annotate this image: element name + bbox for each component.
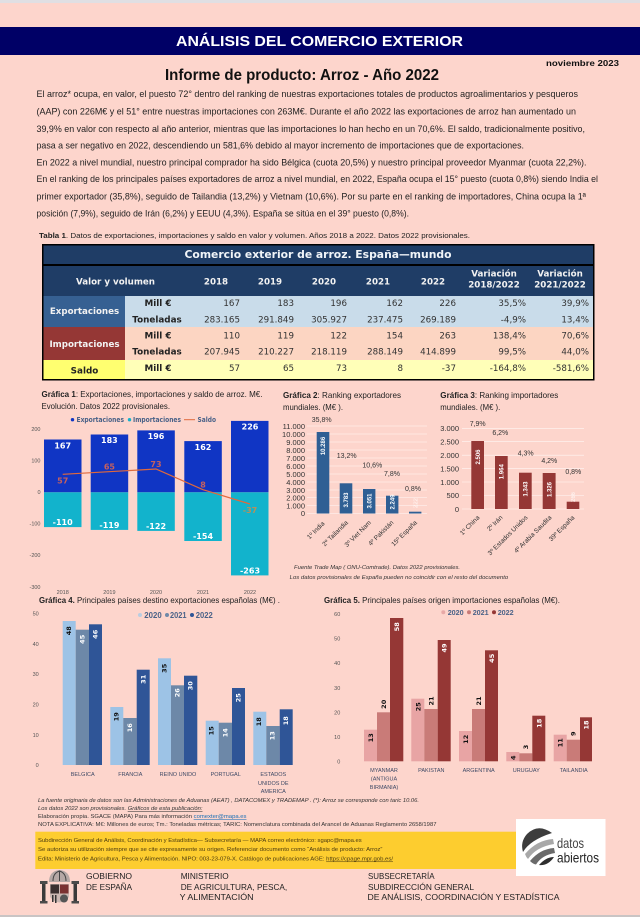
table: comercio exterior: Mill €	[145, 332, 171, 342]
chart 3 heading: Gráfica 3: Ranking importadores	[440, 390, 558, 400]
sources and notes: Elaboración propia. SGACE (MAPA) Para más información comexter@mapa.es	[38, 814, 247, 820]
chart 2: ranking exporters: 7.000	[286, 454, 305, 463]
chart 5: import origins: PAKISTAN	[418, 768, 445, 774]
table: comercio exterior: 57	[229, 364, 240, 374]
chart 2: ranking exporters: 4.000	[286, 478, 305, 487]
chart 1: exports, imports and balance: 196	[148, 432, 165, 441]
chart 2: ranking exporters: 2º Tailandia	[321, 519, 350, 548]
chart 3: ranking importers: 1.343	[524, 481, 530, 497]
legend: 2022	[498, 608, 514, 617]
table: comercio exterior: 65	[283, 364, 294, 374]
chart 1: exports, imports and balance: -200	[29, 553, 40, 559]
government block: DE ESPAÑA	[86, 882, 132, 892]
source note	[290, 565, 508, 581]
chart 5: import origins: 0	[337, 760, 340, 766]
chart 5: import origins: 4	[509, 755, 517, 760]
ministry block: Y ALIMENTACIÓN	[180, 892, 254, 902]
chart 3: ranking importers: 1º China	[459, 514, 482, 537]
chart 2: ranking exporters: 8.000	[286, 446, 305, 455]
chart 1: exports, imports and balance: -119	[99, 521, 120, 530]
table: comercio exterior: 2018/2022	[468, 280, 520, 290]
chart 5: import origins: 58	[393, 622, 401, 631]
chart 5: import origins	[334, 608, 592, 791]
chart 2: ranking exporters: 10.286	[321, 436, 327, 455]
chart 4 heading: Gráfica 4. Principales países destino exportaciones españolas (M€) .	[39, 595, 280, 605]
chart 1: exports, imports and balance: 8	[200, 480, 206, 490]
intro text block: (AAP) con 226M€ y el 51° entre nuestras importaciones con 263M€. Durante el año 2022 las exportaciones de arroz han aumentado un	[36, 106, 576, 118]
table: comercio exterior: 2018	[204, 278, 228, 288]
chart 4: export destinations: 35	[160, 663, 168, 673]
chart 4: export destinations: 46	[92, 629, 100, 639]
chart 1: exports, imports and balance: -110	[53, 518, 73, 527]
chart 2: ranking exporters: 6.000	[286, 462, 305, 471]
table: comercio exterior: Toneladas	[132, 316, 182, 326]
chart 2: ranking exporters: 4º Pakistán	[367, 519, 396, 548]
table: comercio exterior: 2021	[366, 278, 390, 288]
chart 3: ranking importers: 39º España	[548, 514, 577, 543]
chart 4: export destinations: 50	[33, 612, 39, 618]
table: comercio exterior: 70,6%	[561, 332, 589, 342]
government block: GOBIERNO	[86, 871, 132, 881]
chart 5: import origins: 13	[367, 733, 375, 742]
chart 2: ranking exporters: 0,8%	[405, 486, 421, 493]
chart 1: exports, imports and balance: 2019	[103, 590, 116, 596]
chart 1: exports, imports and balance: 0	[37, 490, 40, 496]
chart 5: import origins: URUGUAY	[513, 768, 540, 774]
chart 5: import origins: 20	[334, 710, 340, 716]
chart 1: exports, imports and balance: 57	[57, 476, 68, 486]
table: comercio exterior: Importaciones	[49, 340, 120, 350]
table: comercio exterior: 99,5%	[498, 348, 526, 358]
table: comercio exterior: -4,9%	[501, 316, 526, 326]
chart 5: import origins: 18	[535, 718, 543, 728]
chart 5: import origins: MYANMAR	[370, 768, 398, 774]
table: comercio exterior: Mill €	[145, 299, 171, 309]
table: comercio exterior: -164,8%	[490, 364, 526, 374]
chart 4: export destinations: 30	[33, 672, 39, 678]
icon: striped globe	[522, 828, 555, 865]
chart 4: export destinations	[33, 611, 293, 795]
table: comercio exterior: Valor y volumen	[76, 278, 155, 288]
chart 2: ranking exporters: 35,8%	[312, 417, 332, 424]
chart 2: ranking exporters: 10.000	[282, 430, 305, 439]
chart 2: ranking exporters: 3.000	[286, 486, 305, 495]
chart 2: ranking exporters	[282, 417, 427, 549]
intro text block	[36, 89, 598, 220]
table: comercio exterior: 8	[397, 364, 403, 374]
legend: 2021	[170, 611, 187, 620]
chart 5: import origins: 49	[441, 643, 449, 653]
logo: datos abiertos: abiertos	[557, 850, 599, 866]
chart 4: export destinations: 25	[235, 693, 243, 702]
chart 5: import origins: 30	[334, 686, 340, 692]
chart 4: export destinations: FRANCIA	[118, 772, 143, 778]
chart 3: ranking importers: 1.000	[440, 478, 459, 487]
title: Informe de producto: Arroz - Año 2022	[165, 67, 439, 84]
ministry block: MINISTERIO	[181, 871, 229, 881]
legend	[441, 608, 514, 617]
table: comercio exterior: 2021/2022	[534, 280, 586, 290]
chart 3: ranking importers	[440, 421, 584, 557]
header band: ANÁLISIS DEL COMERCIO EXTERIOR	[176, 33, 463, 50]
chart 3: ranking importers: 1.326	[548, 481, 554, 497]
legend: Saldo	[198, 416, 216, 424]
chart 2: ranking exporters: 11.000	[283, 422, 305, 431]
chart 5 heading: Gráfica 5. Principales países origen importaciones españolas (M€).	[324, 595, 560, 605]
chart 2: ranking exporters: 2.000	[286, 494, 305, 502]
chart 4: export destinations: 26	[174, 688, 182, 697]
chart 4: export destinations: 0	[36, 763, 39, 769]
chart 3: ranking importers: 1.964	[500, 464, 506, 479]
chart 4: export destinations: UNIDOS DE	[258, 781, 289, 787]
chart 1: exports, imports and balance: 2020	[150, 590, 162, 596]
chart 3: ranking importers: 3.000	[440, 424, 459, 433]
table: comercio exterior: 2019	[258, 278, 282, 288]
chart 4: export destinations: 13	[269, 731, 277, 740]
chart 1: exports, imports and balance: 183	[101, 436, 118, 445]
chart 3: ranking importers: 500	[446, 491, 459, 500]
yellow credits box: Subdirección General de Análisis, Coordinación y Estadística— Subsecretaría — MAPA correo electrónico: sgapc@mapa.es	[38, 838, 362, 844]
table: comercio exterior: 167	[223, 299, 240, 309]
table: comercio exterior: 414.899	[420, 348, 456, 358]
intro text block: pasa a ser negativo en 2022, descendiendo un 581,6% debido al mayor incremento de importaciones que de exportaciones.	[36, 140, 524, 152]
chart 1: exports, imports and balance: -263	[240, 566, 260, 576]
chart 4: export destinations: REINO UNIDO	[160, 772, 197, 778]
chart 3: ranking importers: 2.506	[476, 449, 482, 465]
legend	[138, 611, 213, 620]
chart 3: ranking importers: 4,3%	[518, 450, 534, 458]
chart 1: exports, imports and balance: 73	[150, 460, 162, 469]
chart 4: export destinations: 19	[113, 712, 121, 721]
legend	[71, 416, 216, 424]
chart 5: import origins: 45	[488, 653, 496, 663]
intro text block: En 2022 a nivel mundial, nuestro principal comprador ha sido Bélgica (cuota 20,5%) y nuestro principal proveedor Myanmar (cuota 22,2%).	[36, 158, 586, 168]
table: comercio exterior: 110	[223, 332, 240, 342]
icon: coat of arms	[40, 870, 79, 904]
chart 5: import origins: 21	[475, 696, 483, 706]
chart 4: export destinations: 48	[65, 626, 73, 635]
chart 4: export destinations: ESTADOS	[260, 772, 287, 778]
undersecretariat block	[368, 871, 560, 902]
logo: datos abiertos: datos	[557, 835, 584, 851]
table: comercio exterior: 35,5%	[498, 299, 526, 309]
undersecretariat block: SUBSECRETARÍA	[368, 871, 435, 881]
chart 5: import origins: 11	[557, 738, 565, 747]
table: comercio exterior: 269.189	[420, 316, 456, 326]
chart 1: exports, imports and balance: 2021	[197, 590, 209, 596]
chart 1: exports, imports and balance: 226	[242, 422, 259, 432]
chart 5: import origins: BIRMANIA)	[370, 785, 398, 791]
chart 2: ranking exporters: 3.783	[344, 492, 350, 508]
intro text block: El arroz* ocupa, en valor, el puesto 72° dentro del ranking de nuestras exportaciones totales de productos agroalimentarios y pesqueros	[36, 89, 578, 100]
yellow credits box	[35, 832, 518, 869]
chart 1: exports, imports and balance	[29, 416, 268, 596]
undersecretariat block: SUBDIRECCIÓN GENERAL	[368, 882, 474, 892]
chart 4: export destinations: 16	[126, 723, 134, 732]
table: comercio exterior: Exportaciones	[50, 307, 119, 317]
chart 4: export destinations: 20	[33, 702, 39, 708]
chart 2: ranking exporters: 2.249	[390, 494, 396, 510]
government block	[86, 871, 132, 892]
chart 3: ranking importers: 2º Irán	[486, 514, 505, 533]
chart 4: export destinations: 14	[221, 728, 229, 737]
yellow credits box: Edita: Ministerio de Agricultura, Pesca y Alimentación. NIPO: 003-23-079-X. Catálogo de publicaciones AGE: https://cpage.mpr.gob.es/	[38, 856, 394, 862]
chart 3 heading: mundiales. (M€ ).	[440, 402, 500, 412]
chart 1: exports, imports and balance: 65	[104, 462, 115, 472]
chart 3: ranking importers: 4º Arabia Saudita	[513, 514, 554, 555]
table: comercio exterior: Mill €	[145, 364, 171, 374]
chart 5: import origins: 10	[334, 735, 340, 741]
chart 2: ranking exporters: 3.051	[368, 493, 374, 509]
table: comercio exterior: 44,0%	[561, 348, 589, 358]
chart 2: ranking exporters: 1.000	[286, 502, 305, 510]
chart 5: import origins: 25	[414, 702, 422, 711]
chart 2 heading: Gráfica 2: Ranking exportadores	[283, 390, 401, 400]
chart 1: exports, imports and balance: 100	[31, 458, 40, 464]
chart 4: export destinations: 18	[255, 717, 263, 726]
chart 3 heading	[440, 390, 558, 412]
chart 3: ranking importers: 3º Estados Unidos	[487, 514, 530, 557]
chart 5: import origins: TAILANDIA	[560, 768, 588, 774]
date: noviembre 2023	[546, 58, 619, 68]
chart 3: ranking importers: 0	[455, 505, 459, 514]
table: comercio exterior	[42, 244, 594, 380]
table caption: Tabla 1. Datos de exportaciones, importaciones y saldo en valor y volumen. Años 2018 a 2022. Datos 2022 provisionales.	[39, 231, 470, 240]
table: comercio exterior: -581,6%	[553, 364, 589, 374]
chart 4: export destinations: 45	[78, 634, 86, 644]
table: comercio exterior: 183	[277, 299, 294, 309]
legend: 2021	[473, 608, 489, 617]
table: comercio exterior: 122	[330, 332, 347, 342]
table: comercio exterior: 13,4%	[561, 316, 589, 326]
yellow credits box: Se autoriza su utilización siempre que se cite expresamente su origen. Referenciar documento como “Análisis de producto: Arroz”	[38, 847, 383, 853]
chart 5: import origins: 60	[334, 612, 340, 618]
chart 2: ranking exporters: 3º Viet Nam	[344, 519, 373, 549]
table: comercio exterior: 210.227	[258, 348, 294, 358]
chart 2: ranking exporters: 7,8%	[384, 471, 400, 478]
chart 1 heading: Evolución. Datos 2022 provisionales.	[42, 401, 170, 411]
table: comercio exterior: 291.849	[258, 316, 294, 326]
table: comercio exterior: Toneladas	[132, 348, 182, 358]
logo: datos abiertos	[516, 819, 606, 876]
legend: 2020	[448, 608, 464, 617]
table: comercio exterior: Comercio exterior de arroz. España—mundo	[184, 248, 452, 261]
table: comercio exterior: -37	[442, 364, 456, 374]
source note: Fuente Trade Map ( ONU-Comtrade). Datos 2022 provisionales.	[294, 565, 460, 571]
chart 5: import origins: ARGENTINA	[463, 768, 495, 774]
chart 4: export destinations: PORTUGAL	[211, 772, 241, 778]
chart 4: export destinations: 10	[33, 733, 39, 739]
chart 1: exports, imports and balance: 2018	[57, 590, 69, 596]
chart 2: ranking exporters: 1º India	[306, 520, 327, 541]
table: comercio exterior: 154	[386, 332, 403, 342]
chart 5: import origins: 12	[462, 735, 470, 744]
chart 1: exports, imports and balance: -154	[193, 532, 213, 541]
source note: Los datos provisionales de España pueden no coincidir con el resto del documento	[290, 575, 508, 581]
table: comercio exterior: Variación	[537, 268, 583, 280]
table: comercio exterior: 2022	[421, 278, 445, 288]
chart 3: ranking importers: 0,8%	[565, 469, 581, 476]
chart 2: ranking exporters: 15º España	[390, 519, 419, 548]
table: comercio exterior: 305.927	[311, 316, 347, 326]
table: comercio exterior: 39,9%	[561, 299, 589, 309]
chart 4: export destinations: 31	[139, 674, 147, 684]
ministry block	[180, 871, 287, 902]
chart 3: ranking importers: 2.500	[440, 438, 459, 446]
sources and notes: Los datos 2022 son provisionales. Gráficos de esta publicación:	[38, 806, 203, 812]
chart 1: exports, imports and balance: 162	[195, 443, 211, 452]
table: comercio exterior: 162	[386, 299, 403, 309]
chart 1: exports, imports and balance: 200	[31, 427, 40, 433]
table: comercio exterior: 226	[439, 299, 456, 309]
chart 1: exports, imports and balance: 167	[54, 442, 71, 450]
legend: 2020	[144, 611, 162, 620]
table: comercio exterior: 288.149	[367, 348, 403, 358]
chart 2: ranking exporters: 5.000	[286, 470, 305, 479]
table: comercio exterior: Saldo	[71, 366, 98, 376]
sources and notes	[38, 798, 436, 828]
legend: 2022	[196, 611, 213, 620]
chart 5: import origins: 18	[583, 720, 591, 730]
chart 2: ranking exporters: 13,2%	[337, 453, 357, 460]
chart 1: exports, imports and balance: -100	[29, 522, 40, 528]
chart 3: ranking importers: 6,2%	[492, 430, 508, 437]
intro text block: 39,9% en valor con respecto al año anterior, mientras que las importaciones lo han hecho en un 70,6%. El saldo, tradicionalmente positivo,	[36, 124, 585, 135]
table: comercio exterior: 138,4%	[493, 332, 526, 342]
header band	[0, 27, 640, 55]
chart 2: ranking exporters: 222	[414, 497, 420, 508]
table: comercio exterior: 73	[336, 364, 347, 374]
chart 4: export destinations: 18	[282, 716, 290, 725]
chart 1 heading: Gráfica 1: Exportaciones, importaciones y saldo de arroz. M€.	[42, 389, 262, 399]
chart 2 heading	[283, 390, 401, 412]
chart 3: ranking importers: 4,2%	[541, 458, 557, 465]
chart 5: import origins: 9	[570, 731, 578, 736]
table: comercio exterior: 207.945	[204, 348, 240, 358]
chart 1 heading	[42, 389, 262, 411]
chart 5: import origins: 40	[334, 661, 340, 667]
chart 4: export destinations: BELGICA	[71, 772, 95, 778]
chart 3: ranking importers: 7,9%	[470, 421, 486, 428]
chart 3: ranking importers: 2.000	[440, 451, 459, 460]
intro text block: posición (7,9%), seguido de Irán (6,2%) y EEUU (4,3%). España se sitúa en el 39° puesto (0,8%).	[36, 208, 409, 220]
chart 2: ranking exporters: 10,6%	[362, 462, 382, 470]
undersecretariat block: DE ANÁLISIS, COORDINACIÓN Y ESTADÍSTICA	[368, 892, 560, 902]
table: comercio exterior: 283.165	[204, 316, 240, 326]
chart 5: import origins: 20	[380, 699, 388, 709]
intro text block: En el ranking de los principales países exportadores de arroz a nivel mundial, en 2022, España ocupa el 15° puesto (cuota 0,8%) siendo India el	[36, 174, 598, 185]
chart 1: exports, imports and balance: -37	[243, 506, 257, 515]
chart 3: ranking importers: 266	[571, 491, 577, 502]
chart 1: exports, imports and balance: -300	[29, 585, 40, 591]
chart 3: ranking importers: 1.500	[440, 464, 459, 474]
table: comercio exterior: Variación	[471, 268, 517, 280]
legend: Importaciones	[133, 416, 181, 424]
intro text block: primer exportador (35,8%), seguido de Tailandia (13,2%) y Vietnam (10,6%). Por su parte en el ranking de importadores, China ocupa la 1ª	[36, 192, 586, 202]
chart 5: import origins: 50	[334, 637, 340, 643]
table: comercio exterior: 237.475	[367, 316, 403, 326]
chart 2 heading: mundiales. (M€ ).	[283, 402, 343, 412]
chart 4: export destinations: 40	[33, 642, 39, 648]
chart 4: export destinations: AMERICA	[261, 789, 286, 795]
chart 5: import origins: 21	[427, 696, 435, 706]
chart 2: ranking exporters: 0	[301, 509, 305, 518]
table: comercio exterior: 2020	[312, 278, 336, 288]
table: comercio exterior: 263	[439, 332, 456, 342]
chart 1: exports, imports and balance: 2022	[244, 590, 256, 596]
chart 5: import origins: (ANTIGUA	[371, 776, 397, 782]
table: comercio exterior: 218.119	[311, 348, 347, 358]
chart 5: import origins: 3	[522, 745, 530, 749]
chart 2: ranking exporters: 9.000	[286, 438, 305, 447]
table: comercio exterior: 196	[330, 299, 347, 309]
table: comercio exterior: 119	[277, 332, 294, 342]
sources and notes: NOTA EXPLICATIVA: M€: Millones de euros; Tm.: Toneladas métricas; TARIC: Nomenclatura combinada del Arancel de Aduanas Reglamento 2658/1987	[38, 822, 436, 828]
chart 4: export destinations: 15	[208, 726, 216, 735]
chart 4: export destinations: 30	[187, 681, 195, 690]
sources and notes: La fuente originaria de datos son las Administraciones de Aduanas (AEAT) , DATACOMEX y TRADEMAP . (*): Arroz se corresponde con taric 10.06.	[38, 798, 419, 804]
chart 1: exports, imports and balance: -122	[146, 522, 166, 531]
ministry block: DE AGRICULTURA, PESCA,	[181, 882, 287, 892]
legend: Exportaciones	[76, 416, 124, 424]
